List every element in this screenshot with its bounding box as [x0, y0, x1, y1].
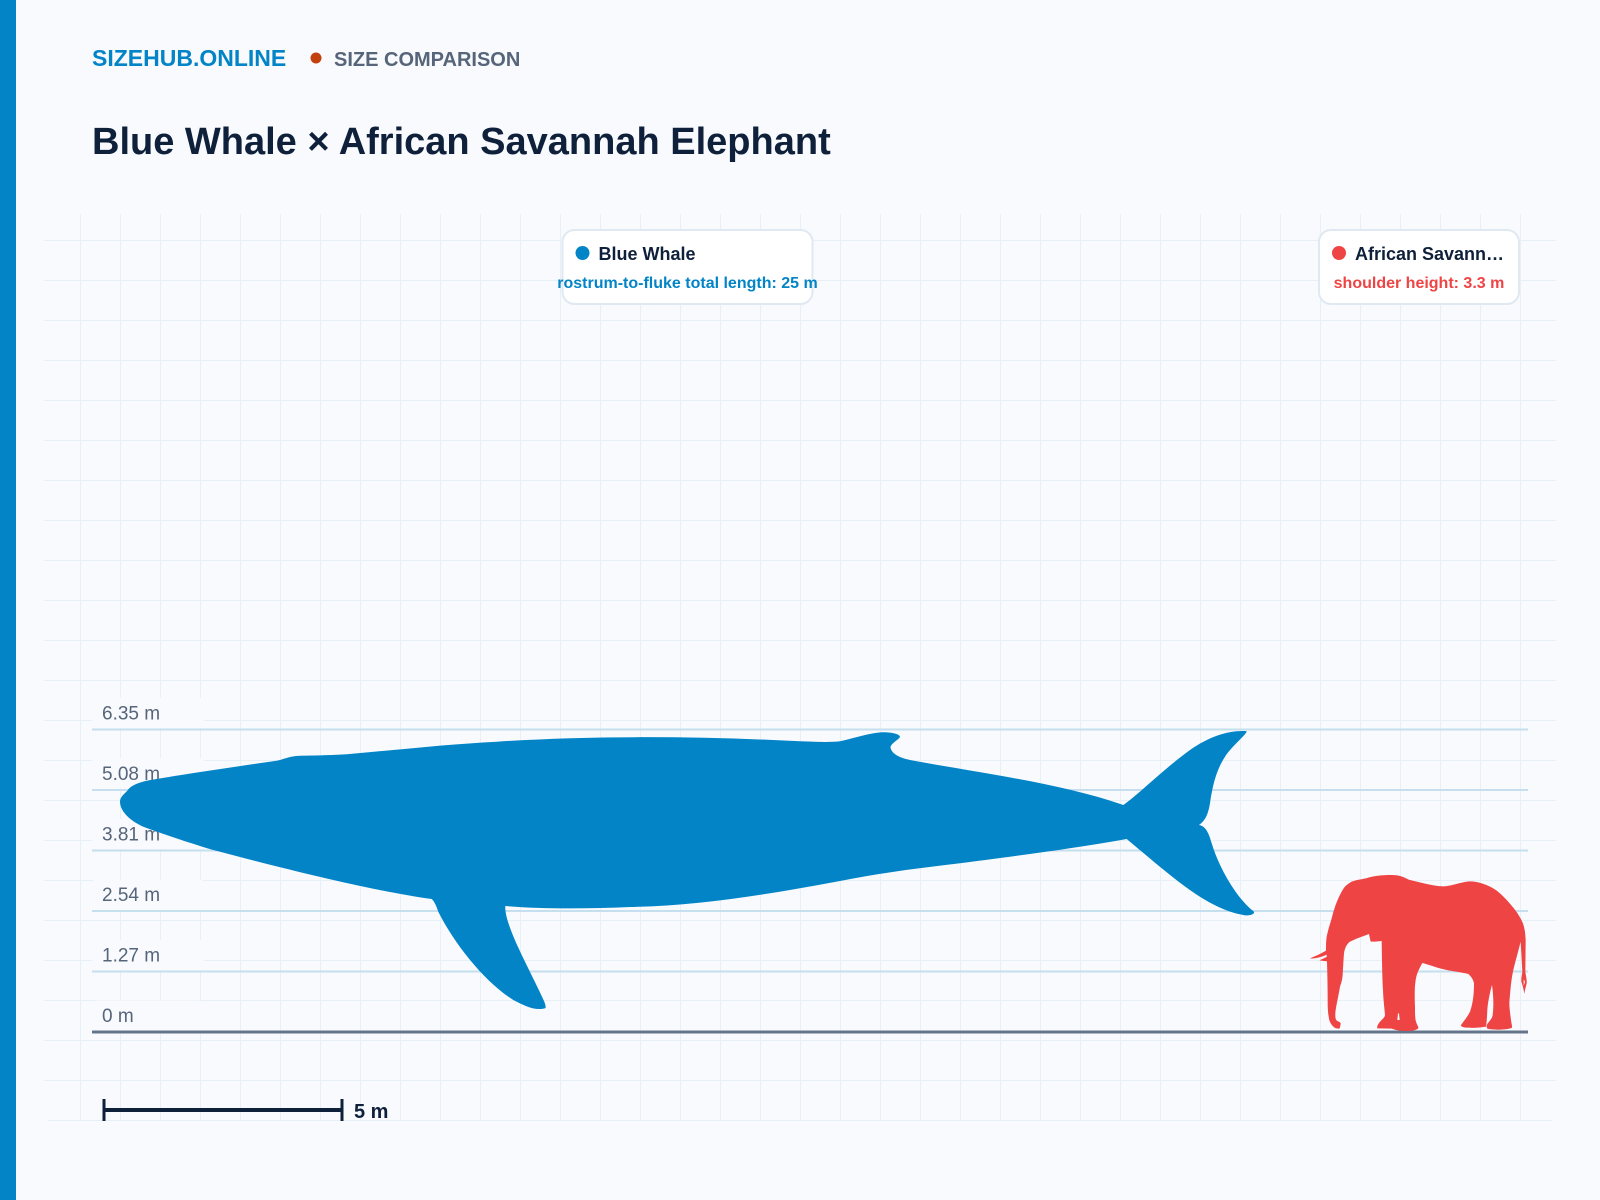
legend card: african savannah elephant — [1319, 230, 1519, 304]
silhouette: blue whale — [120, 731, 1254, 1009]
height scale: 0 m — [102, 1006, 134, 1027]
legend card: blue whale — [557, 230, 818, 304]
header dot — [310, 52, 322, 64]
height scale — [92, 698, 1528, 1032]
legend card: african savannah elephant: shoulder height: 3.3 m — [1334, 275, 1504, 292]
height scale: 6.35 m — [102, 704, 160, 724]
silhouette: african savannah elephant — [1310, 875, 1527, 1031]
height scale: 2.54 m — [102, 885, 160, 906]
legend card: blue whale: rostrum-to-fluke total length: 25 m — [557, 275, 818, 292]
left accent bar — [0, 0, 16, 1200]
header category: SIZE COMPARISON — [334, 49, 520, 71]
legend card: african savannah elephant: African Savann… — [1355, 244, 1504, 264]
scale bar — [104, 1099, 388, 1123]
title: Blue Whale × African Savannah Elephant — [92, 121, 831, 163]
height scale: 3.81 m — [102, 824, 160, 846]
height scale: 5.08 m — [102, 764, 160, 785]
header brand: SIZEHUB.ONLINE — [92, 45, 286, 71]
height scale: 1.27 m — [102, 946, 160, 966]
legend card: blue whale: Blue Whale — [598, 244, 696, 264]
scale bar label: 5 m — [354, 1101, 388, 1123]
